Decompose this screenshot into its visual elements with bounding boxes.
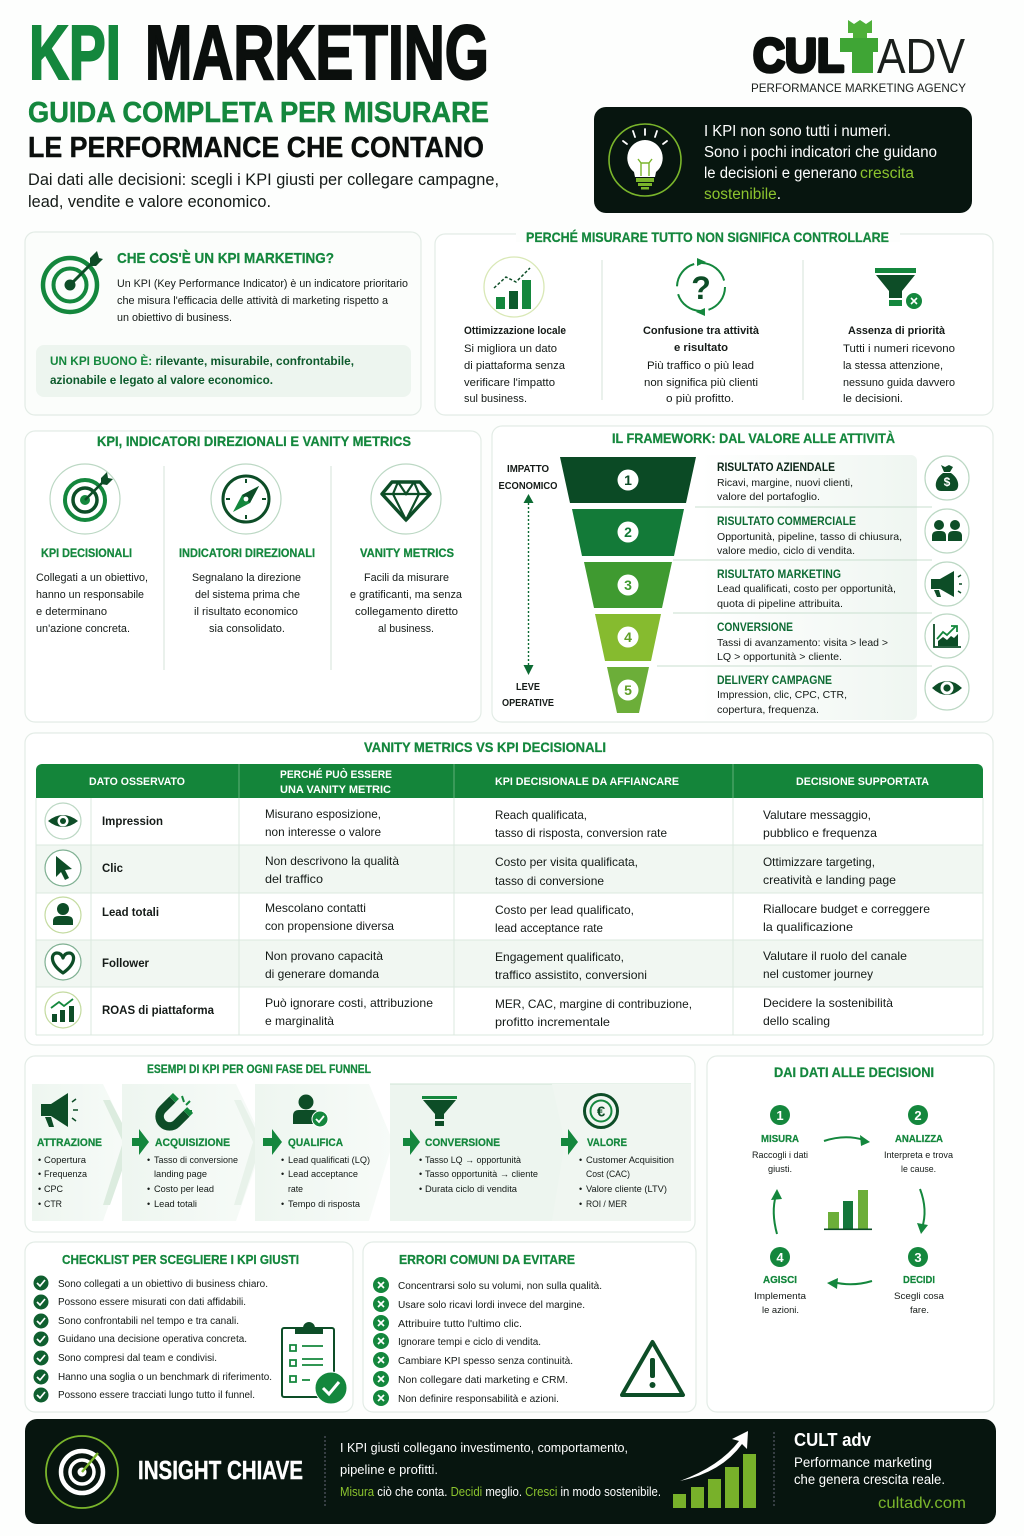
- table row labels: Lead totali: [102, 905, 159, 919]
- stage: acquisizione: ACQUISIZIONE: [155, 1137, 230, 1149]
- text: assenza di priorità: nessuno guida davvero: [843, 377, 955, 389]
- level 4 text: Tassi di avanzamento: visita > lead >: [717, 637, 888, 649]
- table column: decisione supportata: Riallocare budget e correggere: [763, 902, 930, 916]
- funnel: 2: [624, 524, 632, 540]
- column: vanity metrics: collegamento diretto: [355, 606, 458, 618]
- table row labels: Impression: [102, 814, 163, 828]
- stage: valore: •: [579, 1155, 582, 1165]
- panel: KPI, indicatori direzionali, vanity: [25, 431, 481, 722]
- step 2: analizza: ANALIZZA: [895, 1133, 943, 1145]
- checklist items: Sono collegati a un obiettivo di business chiaro.: [58, 1279, 268, 1290]
- callout: un KPI buono: [36, 345, 411, 397]
- stage: acquisizione: •: [147, 1199, 150, 1209]
- heading: CHE COS'È UN KPI MARKETING?: [117, 250, 334, 267]
- icon: funnel: [422, 1096, 457, 1126]
- icon: money bag: [925, 456, 969, 500]
- level 5 text: DELIVERY CAMPAGNE: [717, 675, 832, 687]
- funnel: 4: [624, 629, 632, 645]
- panel: checklist: [25, 1242, 353, 1412]
- table column: KPI decisionale: lead acceptance rate: [495, 921, 603, 935]
- table column: KPI decisionale: Engagement qualificato,: [495, 950, 624, 964]
- stage: valore: Customer Acquisition: [586, 1155, 674, 1165]
- checklist items: Guidano una decisione operativa concreta.: [58, 1334, 247, 1345]
- level 4 text: [717, 622, 888, 663]
- step 3: decidi: DECIDI: [903, 1274, 935, 1286]
- table column: decisione supportata: Valutare messaggio,: [763, 808, 871, 822]
- icon: light bulb: [609, 124, 681, 196]
- table column: perché può essere vanity: Può ignorare costi, attribuzione: [265, 996, 433, 1010]
- icon: megaphone: [41, 1093, 78, 1127]
- icon: local optimisation chart: [484, 257, 544, 317]
- stage: valore: •: [579, 1199, 582, 1209]
- stage: valore: ROI / MER: [586, 1199, 627, 1209]
- table header: DECISIONE SUPPORTATA: [796, 776, 929, 788]
- text: assenza di priorità: la stessa attenzione,: [843, 360, 943, 372]
- stage: acquisizione: •: [147, 1155, 150, 1165]
- heading: KPI, INDICATORI DIREZIONALI E VANITY METRICS: [97, 433, 411, 449]
- axis: impact to levers: [498, 464, 558, 709]
- stage arrows: [132, 1129, 578, 1155]
- title: KPI: [29, 10, 121, 96]
- icon: warning triangle: [622, 1342, 683, 1395]
- table header: KPI DECISIONALE DA AFFIANCARE: [495, 776, 679, 788]
- error items: Non collegare dati marketing e CRM.: [398, 1375, 568, 1386]
- step 3: decidi: [894, 1247, 945, 1316]
- subtitle green: GUIDA COMPLETA PER MISURARE: [28, 97, 489, 129]
- table column: perché può essere vanity: Non provano capacità: [265, 949, 383, 963]
- table column: perché può essere vanity: con propensione diversa: [265, 919, 394, 933]
- text: confusione: o più profitto.: [666, 393, 734, 405]
- column: KPI decisionali: un'azione concreta.: [36, 623, 130, 635]
- heading: INSIGHT CHIAVE: [138, 1455, 303, 1485]
- heading: ERRORI COMUNI DA EVITARE: [399, 1252, 575, 1267]
- icon: megaphone: [925, 562, 969, 606]
- stage: attrazione: •: [38, 1199, 41, 1209]
- error items: Concentrarsi solo su volumi, non sulla qualità.: [398, 1281, 602, 1292]
- panel: errori comuni: [363, 1242, 696, 1412]
- table row labels: Clic: [102, 861, 123, 875]
- icon: person row: [45, 897, 81, 933]
- table column: perché può essere vanity: non interesse o valore: [265, 825, 381, 839]
- column: indicatori direzionali: del sistema prima che: [195, 589, 300, 601]
- funnel: 5: [624, 682, 632, 698]
- step 1: misura: 1: [776, 1108, 784, 1123]
- icon: target: [46, 1436, 118, 1508]
- table column: perché può essere vanity: Mescolano contatti: [265, 901, 366, 915]
- checklist items: Possono essere misurati con dati affidabili.: [58, 1297, 246, 1308]
- step 1: misura: Raccogli i dati: [752, 1150, 808, 1161]
- panel: esempi di KPI per fase: [25, 1056, 695, 1232]
- column: vanity metrics: al business.: [378, 623, 434, 635]
- definition text: un obiettivo di business.: [117, 312, 232, 324]
- table row labels: [102, 814, 214, 1017]
- table header: [36, 764, 983, 798]
- funnel: [560, 457, 696, 713]
- stage: acquisizione: [147, 1093, 238, 1209]
- logo: CULT ADV: ADV: [877, 30, 965, 84]
- table column: decisione supportata: [763, 808, 930, 1028]
- quote text: sostenibile.: [704, 186, 781, 203]
- level 3 text: [717, 569, 896, 610]
- checklist items: Sono compresi dal team e condivisi.: [58, 1353, 217, 1364]
- icon: eye row: [45, 803, 81, 839]
- icon: euro coin: €: [597, 1104, 606, 1120]
- column: indicatori direzionali: sia consolidato.: [209, 623, 285, 635]
- step 4: agisci: AGISCI: [763, 1274, 797, 1286]
- quote text: crescita: [860, 165, 914, 182]
- level 5 text: [717, 675, 847, 716]
- intro text: lead, vendite e valore economico.: [28, 193, 271, 211]
- table column: KPI decisionale: MER, CAC, margine di contribuzione,: [495, 997, 692, 1011]
- title: [29, 10, 489, 96]
- heading: DAI DATI ALLE DECISIONI: [774, 1064, 934, 1080]
- panel: vanity metrics vs KPI table: [25, 733, 993, 1045]
- callout: un KPI buono: azionabile e legato al valore economico.: [50, 373, 273, 387]
- error items: Ignorare tempi e ciclo di vendita.: [398, 1337, 541, 1348]
- logo: CULT ADV: CUL: [753, 28, 844, 82]
- text: ottimizzazione locale: di piattaforma senza: [464, 360, 566, 372]
- table column: KPI decisionale: traffico assistito, conversioni: [495, 968, 647, 982]
- quote text: le decisioni e generano: [704, 165, 857, 182]
- stage: conversione: Tasso LQ → opportunità: [425, 1155, 521, 1165]
- logo: CULT ADV: PERFORMANCE MARKETING AGENCY: [751, 81, 966, 95]
- column: indicatori direzionali: INDICATORI DIREZIONALI: [179, 548, 315, 560]
- title: MARKETING: [145, 10, 489, 96]
- step 4: agisci: 4: [776, 1250, 784, 1265]
- stage: acquisizione: landing page: [154, 1169, 207, 1179]
- table column: decisione supportata: pubblico e frequenza: [763, 826, 877, 840]
- axis: impact to levers: ECONOMICO: [498, 481, 558, 492]
- table column: perché può essere vanity: [265, 807, 433, 1028]
- level 2 text: [717, 516, 902, 557]
- stage: qualifica: •: [281, 1155, 284, 1165]
- callout: KPI quote: [594, 107, 972, 213]
- text: confusione: [643, 325, 760, 405]
- checklist items: [58, 1279, 272, 1401]
- stage: valore: Cost (CAC): [586, 1169, 630, 1179]
- quote text: I KPI non sono tutti i numeri.: [704, 123, 891, 140]
- table column: decisione supportata: la qualificazione: [763, 920, 853, 934]
- stage: attrazione: •: [38, 1169, 41, 1179]
- stage: qualifica: [281, 1094, 370, 1209]
- table column: decisione supportata: Valutare il ruolo del canale: [763, 949, 907, 963]
- insight text: Misura ciò che conta. Decidi meglio. Cresci in modo sostenibile.: [340, 1484, 661, 1499]
- stage: attrazione: Copertura: [44, 1155, 86, 1165]
- level 3 text: RISULTATO MARKETING: [717, 569, 841, 581]
- cross bullets: [373, 1277, 389, 1406]
- table column: KPI decisionale: [495, 808, 692, 1029]
- stage: conversione: •: [419, 1169, 422, 1179]
- stage: conversione: •: [419, 1184, 422, 1194]
- check bullets: [34, 1276, 48, 1402]
- stage: qualifica: QUALIFICA: [288, 1137, 343, 1149]
- level 3 text: quota di pipeline attribuita.: [717, 598, 843, 610]
- step 2: analizza: [884, 1105, 954, 1175]
- stage: valore: [579, 1094, 674, 1209]
- table column: perché può essere vanity: del traffico: [265, 872, 323, 886]
- checklist items: Possono essere tracciati lungo tutto il funnel.: [58, 1390, 255, 1401]
- stage: attrazione: ATTRAZIONE: [37, 1137, 102, 1149]
- table column: perché può essere vanity: Non descrivono la qualità: [265, 854, 399, 868]
- column: KPI decisionali: e determinano: [36, 606, 107, 618]
- stage: acquisizione: Tasso di conversione: [154, 1155, 238, 1165]
- header title block: [28, 10, 499, 211]
- level 2 text: RISULTATO COMMERCIALE: [717, 516, 856, 528]
- brand block: cultadv.com: [878, 1495, 966, 1512]
- heading: ESEMPI DI KPI PER OGNI FASE DEL FUNNEL: [147, 1062, 371, 1076]
- axis: impact to levers: LEVE: [516, 682, 540, 693]
- table column: perché può essere vanity: e marginalità: [265, 1014, 334, 1028]
- icon: money bag: $: [944, 475, 951, 489]
- icon: clipboard with check: [282, 1322, 347, 1404]
- table column: decisione supportata: creatività e landing page: [763, 873, 896, 887]
- stage: attrazione: •: [38, 1184, 41, 1194]
- error items: Usare solo ricavi lordi invece del margine.: [398, 1300, 585, 1311]
- growth bars with arrow: [673, 1431, 756, 1508]
- stage: conversione: Tasso opportunità → cliente: [425, 1169, 538, 1179]
- column: vanity metrics: e gratificanti, ma senza: [350, 589, 463, 601]
- step 3: decidi: Scegli cosa: [894, 1291, 945, 1302]
- column: KPI decisionali: Collegati a un obiettivo,: [36, 572, 148, 584]
- stage: conversione: CONVERSIONE: [425, 1137, 500, 1149]
- stage: conversione: [419, 1096, 538, 1194]
- icon: question mark cycle: [677, 258, 725, 316]
- checklist items: Sono confrontabili nel tempo e tra canali.: [58, 1316, 239, 1327]
- step 1: misura: giusti.: [768, 1164, 792, 1175]
- heading: PERCHÉ MISURARE TUTTO NON SIGNIFICA CONTROLLARE: [526, 229, 889, 245]
- stage: attrazione: [37, 1093, 102, 1209]
- level 1 text: RISULTATO AZIENDALE: [717, 462, 835, 474]
- table row labels: ROAS di piattaforma: [102, 1003, 214, 1017]
- checklist items: Hanno una soglia o un benchmark di riferimento.: [58, 1372, 272, 1383]
- column: KPI decisionali: [36, 548, 148, 635]
- icon: target: [43, 251, 103, 312]
- column: indicatori direzionali: il risultato economico: [194, 606, 298, 618]
- icon: heart row: [45, 944, 81, 980]
- level 4 text: CONVERSIONE: [717, 622, 793, 634]
- icon: diamond circle: [371, 464, 441, 534]
- stage: qualifica: rate: [288, 1184, 303, 1194]
- stage: conversione: •: [419, 1155, 422, 1165]
- stage: attrazione: CTR: [44, 1199, 62, 1209]
- definition text: Un KPI (Key Performance Indicator) è un indicatore prioritario: [117, 278, 408, 290]
- column: vanity metrics: Facili da misurare: [364, 572, 449, 584]
- axis: impact to levers: IMPATTO: [507, 464, 549, 475]
- quote text: [704, 123, 937, 203]
- column: KPI decisionali: hanno un responsabile: [36, 589, 144, 601]
- stage: qualifica: Tempo di risposta: [288, 1199, 360, 1209]
- table column: perché può essere vanity: Misurano esposizione,: [265, 807, 381, 821]
- text: assenza di priorità: Tutti i numeri ricevono: [843, 343, 955, 355]
- brand block: CULT adv: [794, 1430, 871, 1450]
- text: ottimizzazione locale: verificare l'impatto: [464, 377, 555, 389]
- icon: person with check: [293, 1094, 328, 1127]
- text: assenza di priorità: Assenza di priorità: [848, 325, 946, 337]
- center bar chart: [824, 1190, 872, 1230]
- stage: valore: VALORE: [587, 1137, 627, 1149]
- heading: VANITY METRICS VS KPI DECISIONALI: [364, 739, 606, 755]
- level 4 text: LQ > opportunità > cliente.: [717, 651, 842, 663]
- panel: insight chiave footer: [25, 1419, 996, 1524]
- table column: KPI decisionale: Costo per lead qualificato,: [495, 903, 634, 917]
- insight text: pipeline e profitti.: [340, 1462, 438, 1477]
- quote text: Sono i pochi indicatori che guidano: [704, 144, 937, 161]
- table header: DATO OSSERVATO: [89, 776, 185, 788]
- definition text: che misura l'efficacia delle attività di marketing rispetto a: [117, 295, 389, 307]
- table column: KPI decisionale: Reach qualificata,: [495, 808, 587, 822]
- stage: qualifica: Lead acceptance: [288, 1169, 358, 1179]
- level 2 text: valore medio, ciclo di vendita.: [717, 545, 855, 557]
- brand block: che genera crescita reale.: [794, 1472, 945, 1487]
- column: indicatori direzionali: Segnalano la direzione: [192, 572, 301, 584]
- text: ottimizzazione locale: sul business.: [464, 393, 527, 405]
- level 3 text: Lead qualificati, costo per opportunità,: [717, 583, 896, 595]
- stage: acquisizione: Lead totali: [154, 1199, 197, 1209]
- brand block: [794, 1430, 966, 1512]
- brand block: Performance marketing: [794, 1455, 932, 1470]
- stage: qualifica: •: [281, 1199, 284, 1209]
- table header: UNA VANITY METRIC: [280, 784, 391, 796]
- column: vanity metrics: VANITY METRICS: [360, 548, 454, 560]
- level 1 text: [717, 462, 853, 503]
- funnel: 3: [624, 577, 632, 593]
- text: confusione: non significa più clienti: [644, 377, 758, 389]
- step 1: misura: [752, 1105, 808, 1175]
- chevron backgrounds: [32, 1084, 691, 1221]
- icon: people: [925, 509, 969, 553]
- logo: CULT ADV: [751, 20, 966, 95]
- axis: impact to levers: OPERATIVE: [502, 698, 554, 709]
- step 4: agisci: le azioni.: [762, 1305, 799, 1316]
- step 2: analizza: le cause.: [901, 1164, 936, 1175]
- step 2: analizza: Interpreta e trova: [884, 1150, 954, 1161]
- text: confusione: Confusione tra attività: [643, 325, 760, 337]
- intro text: Dai dati alle decisioni: scegli i KPI giusti per collegare campagne,: [28, 171, 499, 189]
- stage: attrazione: •: [38, 1155, 41, 1165]
- error items: Cambiare KPI spesso senza continuità.: [398, 1356, 573, 1367]
- column: KPI decisionali: KPI DECISIONALI: [41, 548, 132, 560]
- step 2: analizza: 2: [914, 1108, 922, 1123]
- panel: perché misurare tutto: [435, 228, 993, 415]
- table column: decisione supportata: nel customer journey: [763, 967, 873, 981]
- text: confusione: e risultato: [674, 342, 728, 354]
- heading: CHECKLIST PER SCEGLIERE I KPI GIUSTI: [62, 1252, 299, 1267]
- level 5 text: copertura, frequenza.: [717, 704, 819, 716]
- stage: qualifica: Lead qualificati (LQ): [288, 1155, 370, 1165]
- icon: funnel with cross: [875, 268, 922, 309]
- callout: un KPI buono: UN KPI BUONO È: rilevante, misurabile, confrontabile,: [50, 353, 354, 368]
- level 2 text: Opportunità, pipeline, tasso di chiusura,: [717, 531, 902, 543]
- column: vanity metrics: [350, 548, 463, 635]
- icon: question mark cycle: ?: [691, 270, 711, 306]
- icon: cursor row: [45, 850, 81, 886]
- stage: valore: Valore cliente (LTV): [586, 1184, 667, 1194]
- icon: compass circle: [211, 464, 281, 534]
- error items: [398, 1281, 602, 1405]
- step 3: decidi: 3: [914, 1250, 922, 1265]
- table column: decisione supportata: Decidere la sostenibilità: [763, 996, 893, 1010]
- icon: magnet: [152, 1093, 193, 1134]
- text: confusione: Più traffico o più lead: [647, 360, 754, 372]
- text: ottimizzazione locale: Ottimizzazione locale: [464, 325, 566, 337]
- stage: valore: •: [579, 1184, 582, 1194]
- panel: che cos'è un KPI: [25, 232, 421, 415]
- icon: target circle: [50, 464, 120, 534]
- icon: eye: [925, 666, 969, 710]
- text: ottimizzazione locale: [464, 325, 566, 405]
- stage: conversione: Durata ciclo di vendita: [425, 1184, 517, 1194]
- step 4: agisci: [754, 1247, 807, 1316]
- stage: acquisizione: •: [147, 1184, 150, 1194]
- icon: growth chart: [925, 614, 969, 658]
- table row labels: Follower: [102, 956, 149, 970]
- insight text: I KPI giusti collegano investimento, comportamento,: [340, 1440, 628, 1455]
- funnel: 1: [624, 472, 632, 488]
- level 1 text: valore del portafoglio.: [717, 491, 820, 503]
- table column: perché può essere vanity: di generare domanda: [265, 967, 379, 981]
- table header: PERCHÉ PUÒ ESSERE: [280, 768, 392, 781]
- insight text: [340, 1440, 661, 1499]
- table column: KPI decisionale: profitto incrementale: [495, 1015, 610, 1029]
- table column: decisione supportata: dello scaling: [763, 1014, 830, 1028]
- subtitle black: LE PERFORMANCE CHE CONTANO: [28, 132, 484, 164]
- heading: IL FRAMEWORK: DAL VALORE ALLE ATTIVITÀ: [612, 430, 895, 446]
- level 5 text: Impression, clic, CPC, CTR,: [717, 689, 847, 701]
- stage: acquisizione: Costo per lead: [154, 1184, 214, 1194]
- step 1: misura: MISURA: [761, 1133, 799, 1145]
- cycle arrows: [771, 1135, 928, 1289]
- stage: qualifica: •: [281, 1169, 284, 1179]
- table column: decisione supportata: Ottimizzare targeting,: [763, 855, 875, 869]
- text: assenza di priorità: le decisioni.: [843, 393, 903, 405]
- text: ottimizzazione locale: Si migliora un dato: [464, 343, 557, 355]
- table column: KPI decisionale: tasso di conversione: [495, 874, 604, 888]
- table column: KPI decisionale: tasso di risposta, conversion rate: [495, 826, 667, 840]
- error items: Non definire responsabilità e azioni.: [398, 1394, 559, 1405]
- table column: KPI decisionale: Costo per visita qualificata,: [495, 855, 638, 869]
- step 4: agisci: Implementa: [754, 1291, 807, 1302]
- column: indicatori direzionali: [179, 548, 315, 635]
- panel: framework: [492, 426, 993, 722]
- level 1 text: Ricavi, margine, nuovi clienti,: [717, 477, 853, 489]
- text: assenza di priorità: [843, 325, 955, 405]
- table rows background: [36, 798, 983, 1035]
- stage: attrazione: CPC: [44, 1184, 63, 1194]
- step 3: decidi: fare.: [910, 1305, 929, 1316]
- stage: attrazione: Frequenza: [44, 1169, 87, 1179]
- icon: chart row: [45, 992, 81, 1028]
- intro text: [28, 171, 499, 211]
- definition text: [117, 278, 408, 324]
- panel: dai dati alle decisioni: [707, 1056, 994, 1412]
- error items: Attribuire tutto l'ultimo clic.: [398, 1319, 522, 1330]
